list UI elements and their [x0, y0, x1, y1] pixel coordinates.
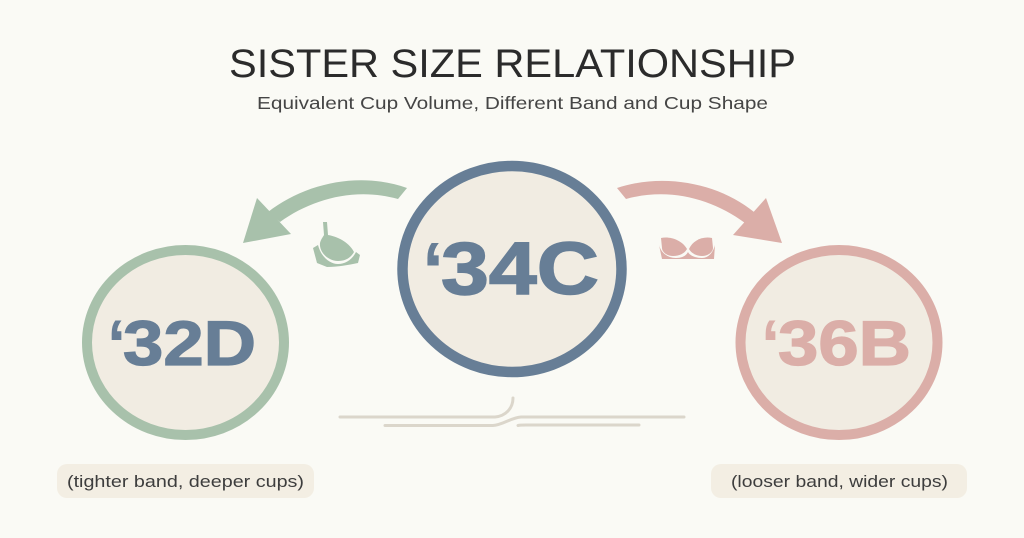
- circle: 36B: ‘: [761, 306, 780, 383]
- subtitle: Equivalent Cup Volume, Different Band and Cup Shape: [257, 93, 768, 113]
- circle: 32D: [87, 250, 284, 435]
- circle: 32D: ‘: [107, 306, 126, 383]
- left arrow: to 32D: [243, 180, 407, 243]
- label: looser band: (looser band, wider cups): [731, 472, 948, 491]
- icon: front view bra: [659, 237, 715, 259]
- icon: side view bra: [313, 222, 360, 267]
- circle: 34C: 34C: [441, 227, 599, 310]
- circle: 32D: 32D: [123, 309, 256, 379]
- circle: 36B: [740, 250, 938, 435]
- circle: 36B: 36B: [778, 309, 911, 379]
- label: tighter band: [57, 464, 314, 498]
- label: looser band: [711, 464, 967, 498]
- circle: 34C: ‘: [422, 226, 444, 315]
- decorative band lines: [340, 398, 684, 426]
- circle: 34C: [402, 166, 622, 372]
- label: tighter band: (tighter band, deeper cups): [67, 472, 304, 491]
- title: SISTER SIZE RELATIONSHIP: [229, 42, 796, 86]
- right arrow: to 36B: [617, 181, 782, 243]
